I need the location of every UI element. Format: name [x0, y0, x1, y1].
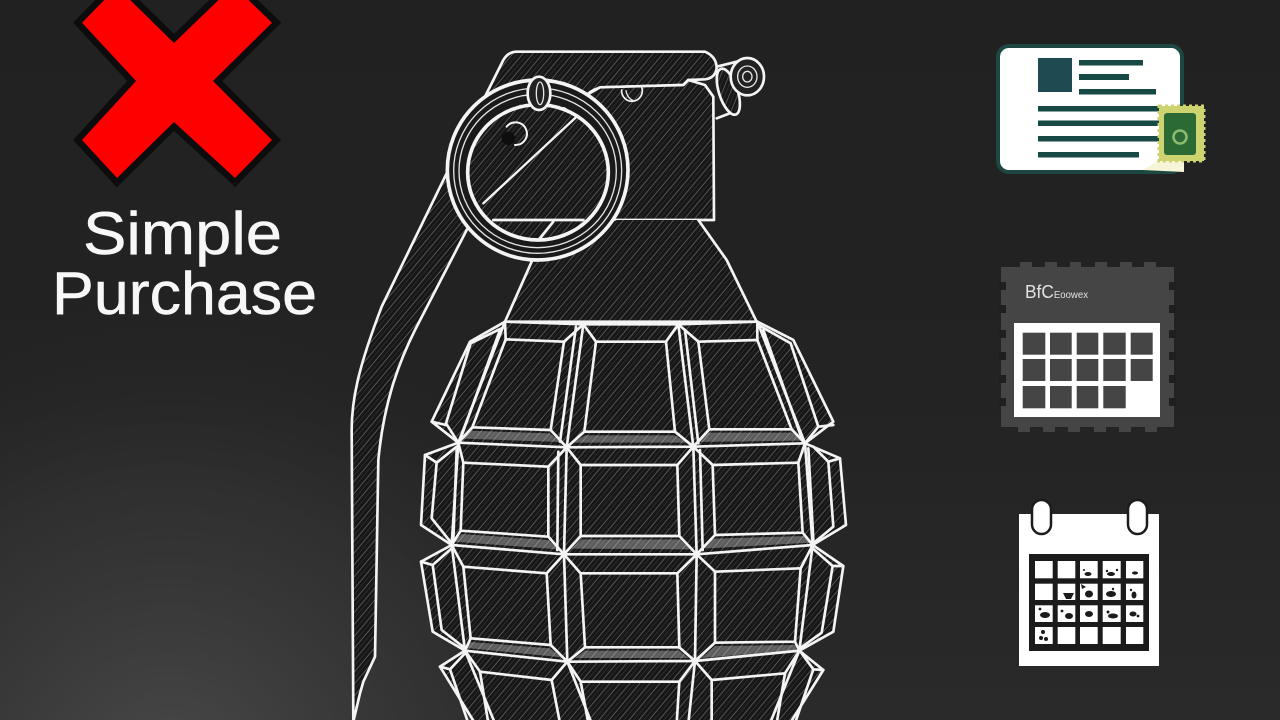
calendar page: [1019, 514, 1159, 666]
grenade pull ring: [447, 77, 628, 260]
icon: grey postage-stamp calendar: [999, 262, 1176, 432]
calendar binder rings: [1032, 500, 1147, 534]
card photo: [1038, 58, 1072, 92]
icon: document card with stamp: [998, 46, 1204, 172]
card: [998, 46, 1182, 172]
stamp base: [1001, 262, 1174, 432]
body silhouette: [421, 322, 846, 720]
grenade lever: [352, 52, 717, 720]
calendar cells: [1035, 561, 1143, 644]
heading: Simple Purchase: Purchase: [52, 260, 317, 327]
green stamp: [1143, 106, 1204, 172]
calendar marks: [1039, 569, 1139, 641]
row 2 panels: [425, 443, 840, 554]
icon: wall calendar: [1019, 500, 1159, 666]
body grid lines: [452, 322, 813, 720]
row 4 panels: [440, 651, 823, 720]
grenade neck: [505, 220, 757, 322]
heading: Simple Purchase: Simple: [83, 200, 282, 267]
card text lines: [1038, 60, 1160, 158]
grenade body: [421, 322, 846, 720]
row 1 panels: [432, 322, 833, 447]
highlighted bands: [453, 431, 811, 658]
grenade top block: [527, 80, 714, 220]
calendar grid: [1029, 554, 1149, 651]
grenade illustration: [352, 52, 846, 720]
perforations: [999, 282, 1176, 406]
calendar panel: [1014, 323, 1160, 417]
heading: Simple Purchase: [52, 200, 317, 327]
calendar squares: [1023, 333, 1153, 408]
grenade pin hinge: [712, 58, 764, 118]
row 3 panels: [421, 545, 843, 662]
stamp label: BfCEoowex: [1025, 282, 1088, 302]
icon: red cross: [82, 0, 272, 178]
